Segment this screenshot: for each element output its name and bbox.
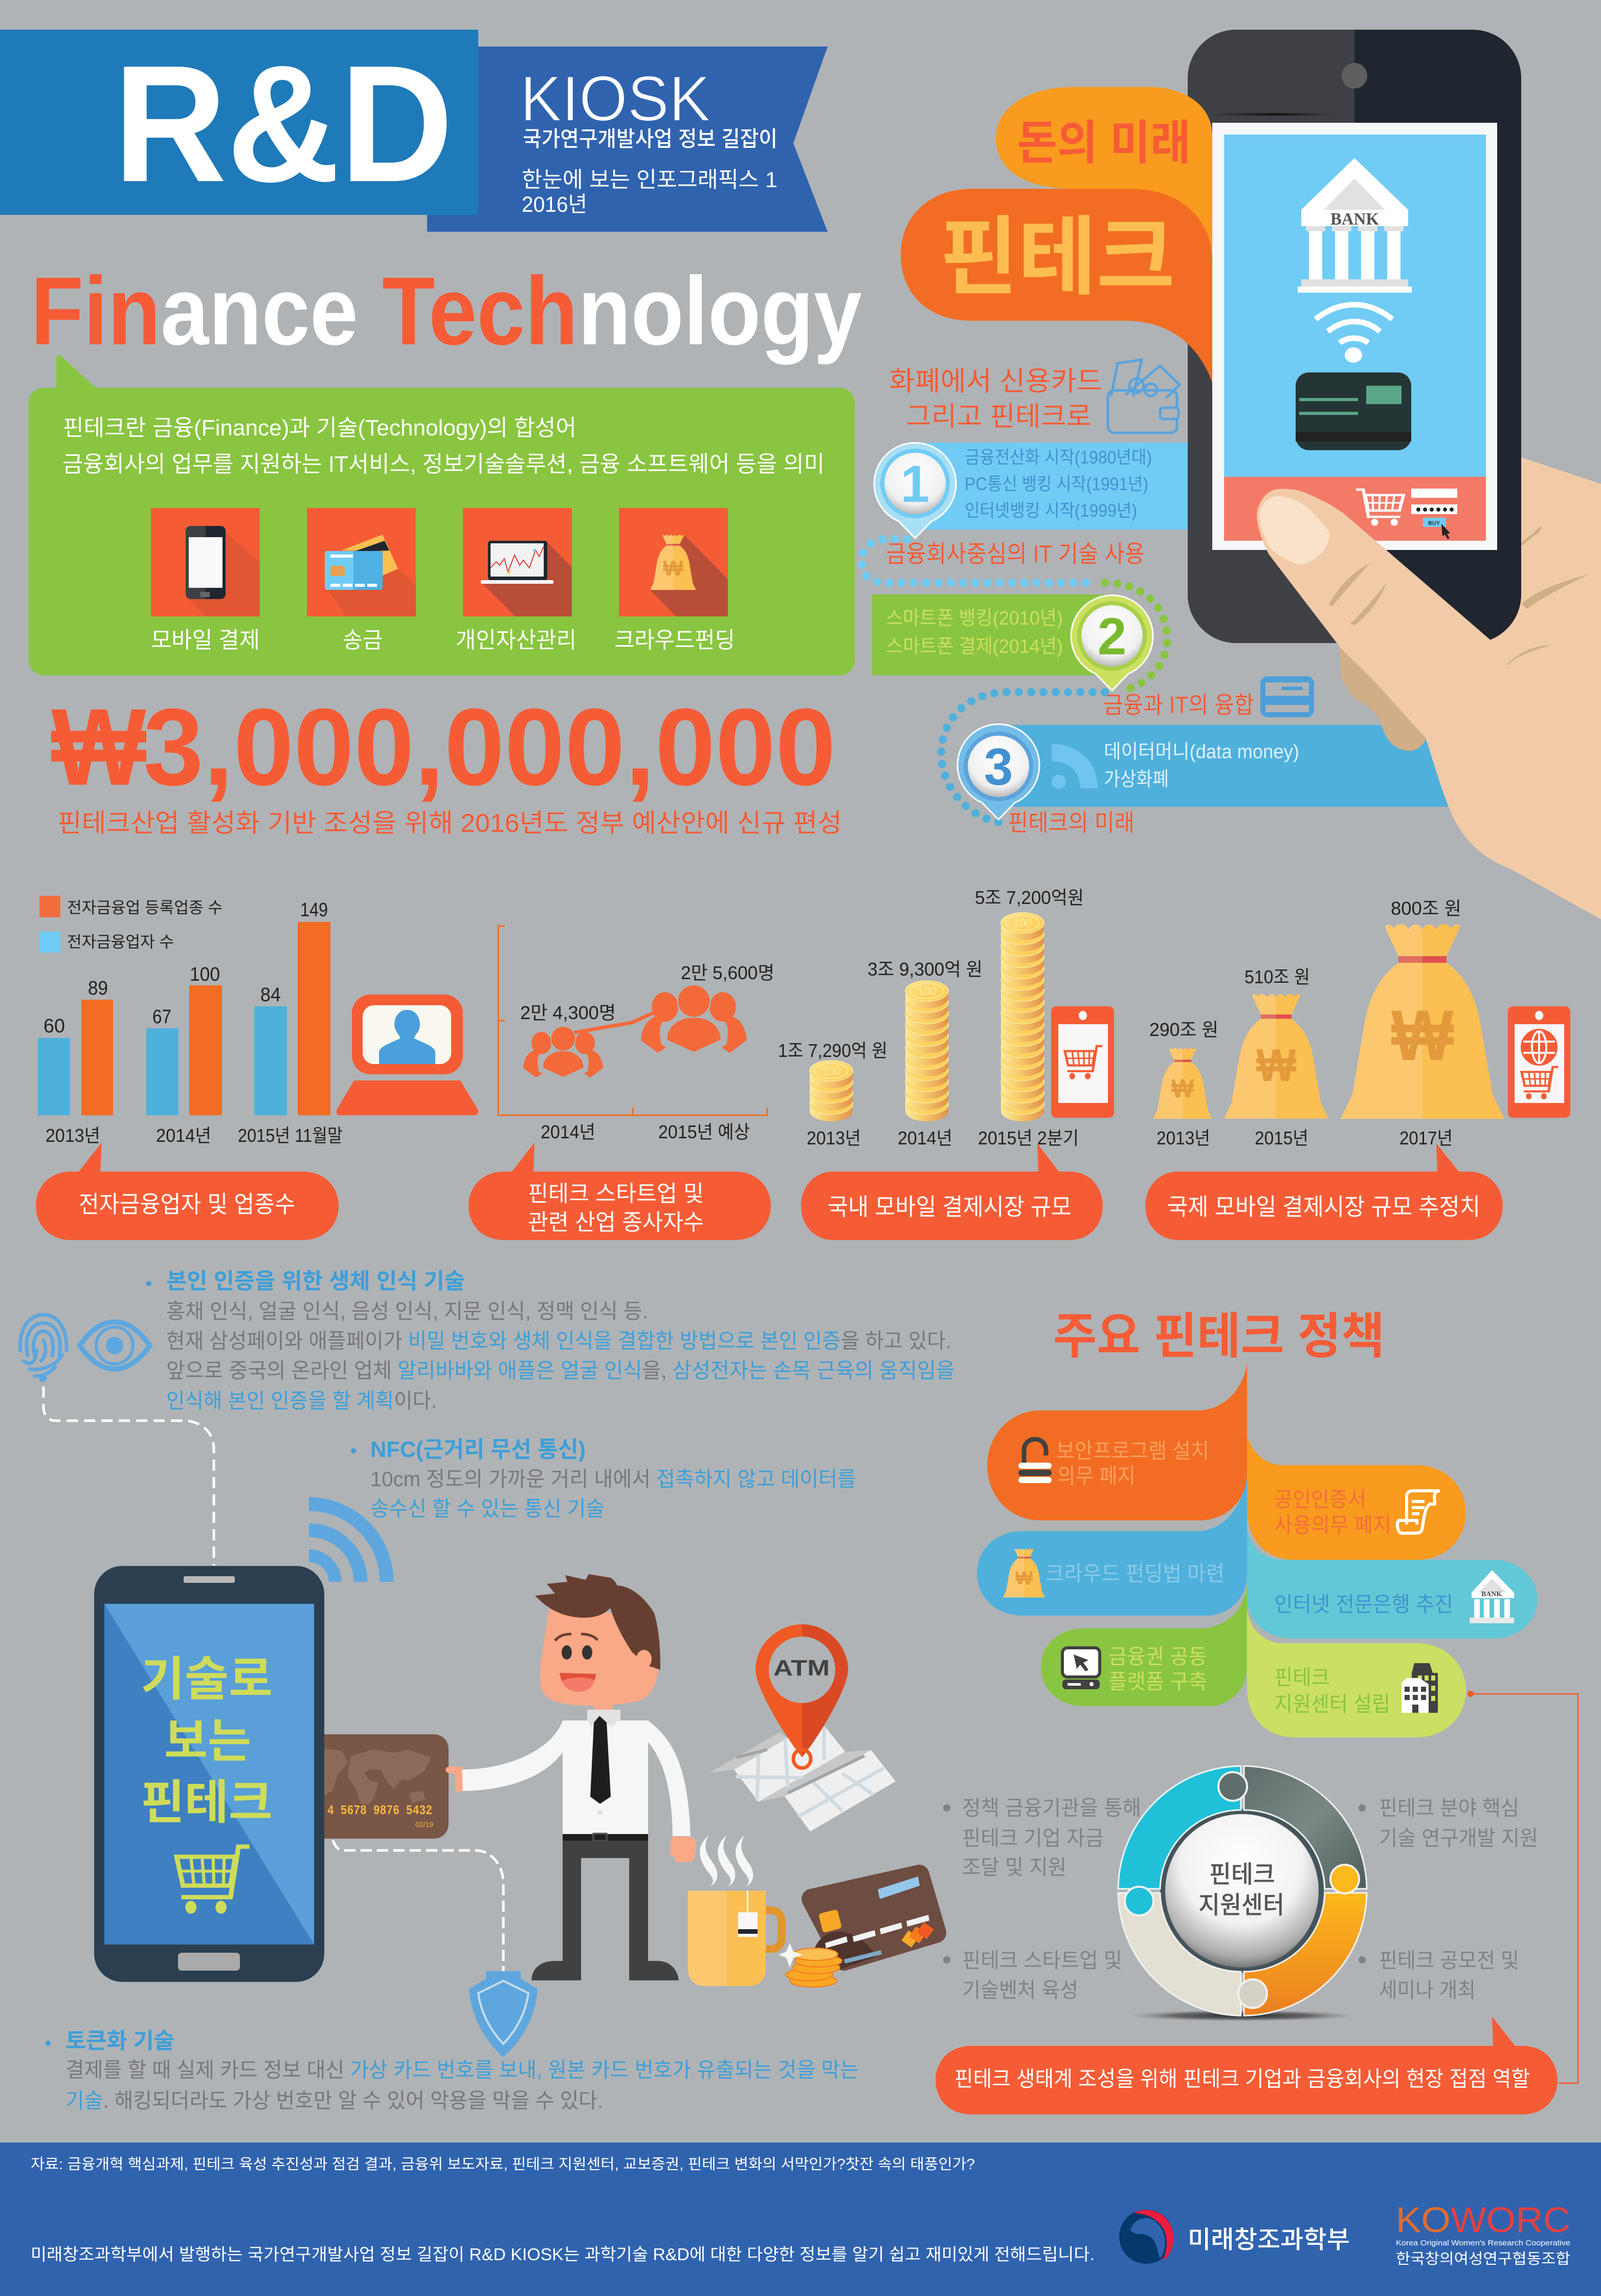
policy: fintech support center: 핀테크 [1274,1666,1330,1689]
icon: people 2014 [523,1026,603,1077]
bag 2013: ₩ [1171,1074,1194,1103]
chart: domestic mobile payment market [778,887,1114,1149]
coin stack 2013 [810,1061,853,1121]
footer [0,2143,1601,2296]
values [778,887,1084,1061]
stage 3 lines: 데이터머니(data money) [1104,741,1299,763]
icon: buildings [1402,1663,1438,1713]
quadrant: R&D [1244,1766,1367,1889]
coin stack 2015 [1001,913,1044,1121]
year labels: 2013년 [46,1125,100,1146]
icon: open lock [1018,1439,1052,1483]
icon: bank small: BANK [1481,1591,1502,1598]
bullet: startups: 기술벤처 육성 [962,1978,1078,2002]
bar values [43,899,328,1037]
icon: bank: BANK [1330,210,1380,229]
bullet: policy finance: 핀테크 기업 자금 [962,1826,1104,1850]
bullet: policy finance: 정책 금융기관을 통해 [962,1796,1141,1820]
band 3 behind hand [1003,725,1463,807]
head [535,1574,660,1712]
year labels: 2013년 [807,1128,861,1149]
quadrant: startup [1118,1893,1241,2016]
callout: fintech startups: 핀테크 스타트업 및 [528,1181,704,1206]
headline caption: 핀테크산업 활성화 기반 조성을 위해 2016년도 정부 예산안에 신규 편성 [57,809,842,837]
big phone: fintech through technology [94,1566,324,1982]
ribbon: KIOSK [427,47,828,232]
policy: security program [987,1362,1247,1520]
policy: crowdfunding platform: 금융권 공동 [1108,1645,1207,1668]
bag 2013 [1153,1048,1212,1119]
bars [38,922,330,1115]
year labels: 2013년 [1157,1128,1210,1149]
year labels [807,1128,1079,1149]
title: Finance Technology: Finance Technology [31,257,862,365]
icon: bank small [1470,1570,1514,1623]
year labels: 2015년 [1255,1128,1308,1149]
bag 2015: ₩ [1256,1040,1296,1091]
credit card being handed: 02/19 [415,1820,433,1828]
big phone text [141,1653,273,1829]
policy: accredited certificate: 사용의무 폐지 [1274,1513,1391,1537]
stage 1 lines: 금융전산화 시작(1980년대) [965,448,1152,468]
pin 3 [958,724,1039,820]
bar values: 67 [152,1006,171,1028]
policy: accredited certificate: 공인인증서 [1274,1488,1366,1511]
pin 2: 2 [1098,607,1126,666]
coin stack 2015: 100 [1013,917,1032,930]
phone screen [1212,123,1497,550]
bullet: core technology R&D [1359,1796,1538,1850]
text block: NFC [351,1437,856,1520]
pin 3: 3 [984,738,1013,796]
coin stack 2014: 100 [918,985,937,998]
values: 1조 7,290억 원 [778,1040,887,1061]
text block: biometrics: 인식해 본인 인증을 할 계획이다. [166,1389,437,1412]
text block: biometrics: 앞으로 중국의 온라인 업체 알리바바와 애플은 얼굴 인식을, 삼성전자는 손목 근육의 움직임을 [166,1359,955,1382]
icon: eye [80,1322,150,1369]
icon: ATM pin [755,1624,848,1768]
callout: support center role [936,2017,1558,2114]
label: personal finance management: 개인자산관리 [456,628,576,653]
pin 1: 1 [901,455,929,513]
icon: phone with globe and cart [1508,1006,1570,1118]
icon: wifi [1316,305,1392,363]
heading: key fintech policies: 주요 핀테크 정책 [1053,1309,1385,1364]
stage 3 lines [1104,741,1299,790]
speech bubble: fintech [901,189,1212,383]
stage 1 lines: 인터넷뱅킹 시작(1999년) [965,501,1137,521]
icon: map [709,1727,896,1831]
bullet: core technology R&D: 기술 연구개발 지원 [1379,1826,1538,1850]
text block: NFC: 10cm 정도의 가까운 거리 내에서 접촉하지 않고 데이터를 [370,1467,856,1491]
puzzle knobs [1125,1772,1359,2008]
icon: shield [469,1971,538,2057]
icon: NFC waves [309,1504,387,1582]
icon: bank [1298,158,1412,293]
diagram: fintech support center puzzle ring [1118,1766,1367,2021]
shirt [462,1710,691,1836]
icon: wallet with banknotes [1108,360,1180,433]
quadrant: funding [1118,1766,1241,1889]
policy: crowdfunding platform [1041,1586,1247,1706]
bar values: 84 [260,984,281,1006]
heading: from cash to credit cards to fintech [889,366,1102,432]
label: remittance: 송금 [343,628,383,653]
sources: 자료: 금융개혁 핵심과제, 핀테크 육성 추진성과 점검 결과, 금융위 보도자료, 핀테크 지원센터, 교보증권, 핀테크 변화의 서막인가?찻잔 속의 태풍인가? [31,2156,975,2173]
connector: support center to role callout [1467,1691,1578,2083]
text block: NFC: 송수신 할 수 있는 통신 기술 [370,1497,605,1520]
phone: bank app [1188,30,1521,643]
stage 3 caption: 핀테크의 미래 [1008,809,1135,836]
bullet: policy finance: 조달 및 지원 [962,1856,1066,1879]
text block: biometrics: 홍채 인식, 얼굴 인식, 음성 인식, 지문 인식, 정맥 인식 등. [166,1299,648,1323]
legend: 전자금융업 등록업종 수 [67,899,223,917]
policy: internet bank: 인터넷 전문은행 추진 [1274,1593,1453,1616]
label: mobile payment: 모바일 결제 [151,628,260,653]
bag 2015 [1224,994,1328,1118]
icon: terminal [1062,1648,1100,1689]
band: stage 2 [872,594,1115,675]
tie [590,1716,611,1804]
diagram: fintech support center puzzle ring: 지원센터 [1198,1892,1284,1919]
icon tile: remittance [307,508,416,616]
values: 800조 원 [1391,898,1461,919]
text block: biometrics: 본인 인증을 위한 생체 인식 기술 [166,1269,465,1294]
bar values: 60 [43,1015,65,1037]
callout: domestic market [801,1143,1103,1240]
policy: security program: 의무 폐지 [1057,1464,1136,1488]
values: 290조 원 [1149,1019,1218,1040]
bullet: contests and seminars: 세미나 개최 [1379,1978,1476,2002]
hand holding phone (back of hand) [1003,457,1601,919]
icon: people 2015 [641,985,747,1053]
headline number: 3 billion won: ₩ [51,686,146,808]
stage 1 caption: 금융회사중심의 IT 기술 사용 [886,540,1145,567]
dotted connector 2 [1105,583,1167,688]
icon: fingerprint [20,1315,66,1380]
policy: crowdfunding law [977,1473,1247,1616]
policy: crowdfunding platform: 플랫폼 구축 [1108,1670,1207,1693]
logo: KOWORC: 한국창의여성연구협동조합 [1396,2250,1570,2267]
callout: global market: 국제 모바일 결제시장 규모 추정치 [1167,1194,1480,1220]
text block: tokenization: 토큰화 기술 [65,2029,174,2054]
text block: tokenization [46,2029,859,2112]
text block: tokenization: 결제를 할 때 실제 카드 정보 대신 가상 카드 번호를 보내, 원본 카드 번호가 유출되는 것을 막는 [65,2058,859,2082]
connector: biometrics to phone [43,1386,214,1565]
legend: 전자금융업자 수 [67,933,174,951]
logo: ministry name: 미래창조과학부 [1188,2226,1350,2254]
callout: domestic market: 국내 모바일 결제시장 규모 [828,1194,1072,1220]
center label: 핀테크 [1209,1861,1275,1888]
chart: global mobile payment market [1149,898,1570,1149]
icon: scroll [1397,1491,1440,1533]
policy: security program: 보안프로그램 설치 [1056,1439,1209,1463]
band: stage 1 [917,443,1188,529]
logo: KOWORC [1396,2200,1570,2267]
legend [39,896,223,953]
year: 2016년 [522,192,587,217]
logo: ministry emblem [1119,2210,1173,2264]
bar values: 89 [88,978,108,999]
dotted connector 3 [941,692,1105,823]
bag 2017 [1341,924,1504,1119]
thumb creases [1329,525,1590,665]
dotted connector 1 [861,539,1095,583]
icon: credit card [1296,372,1411,450]
heading: from cash to credit cards to fintech: 화폐에서 신용카드 [889,366,1102,396]
bullet: contests and seminars: 핀테크 공모전 및 [1379,1949,1519,1972]
callout: global market [1145,1143,1503,1240]
icon: steaming mug [688,1835,782,1986]
icon tile: mobile payment [151,508,260,616]
bullet: startups [943,1949,1122,2002]
values [1149,898,1461,1040]
icon: ATM pin: ATM [773,1655,830,1681]
quadrant: contest [1244,1893,1367,2016]
icon: shopping cart [176,1847,250,1914]
pin 2 [1071,595,1153,691]
bar values: 149 [300,899,328,921]
value 2015: 2만 5,600명 [681,962,774,983]
axis label 2014: 2014년 [541,1121,595,1142]
value 2014: 2만 4,300명 [520,1002,616,1023]
year labels: 2015년 2분기 [978,1128,1079,1149]
year labels: 2014년 [898,1128,952,1149]
axes [498,926,767,1115]
label: crowdfunding: 크라우드펀딩 [614,628,735,653]
policy: crowdfunding law: 크라우드 펀딩법 마련 [1046,1562,1225,1585]
heading: from cash to credit cards to fintech: 그리고 핀테크로 [906,402,1092,432]
publisher note: 미래창조과학부에서 발행하는 국가연구개발사업 정보 길잡이 R&D KIOSK는 과학기술 R&D에 대한 다양한 정보를 알기 쉽고 재미있게 전해드립니다. [31,2245,1095,2264]
coin stack 2014 [905,981,948,1121]
policy: accredited certificate [1247,1434,1466,1560]
callout: e-finance firms: 전자금융업자 및 업종수 [79,1191,295,1218]
policy: crowdfunding law: ₩ [1015,1568,1033,1588]
chart: fintech startup employees [498,926,774,1142]
year labels: 2014년 [156,1125,211,1146]
KIOSK wordmark: KIOSK [520,63,710,135]
bullet: startups: 핀테크 스타트업 및 [962,1949,1122,1972]
timeline stage 3 [941,692,1299,836]
definition line 2: 금융회사의 업무를 지원하는 IT서비스, 정보기술솔루션, 금융 소프트웨어 등을 의미 [62,452,825,477]
year labels [1157,1128,1453,1149]
year labels: 2015년 11월말 [238,1125,343,1146]
credit card being handed [324,1734,449,1839]
icon: signal [1052,753,1089,789]
timeline stage 1 [861,443,1188,583]
policy: internet bank [1247,1529,1538,1639]
trousers and shoes [531,1834,679,1980]
icon: phone with cart [1051,1006,1114,1118]
stage 2 lines: 스마트폰 뱅킹(2010년) [886,608,1063,629]
subtitle: 국가연구개발사업 정보 길잡이 [523,127,777,151]
definition line 1: 핀테크란 금융(Finance)과 기술(Technology)의 합성어 [63,415,576,440]
coin pile [786,1948,842,1987]
text block: NFC: NFC(근거리 무선 통신) [370,1437,586,1462]
callout: fintech startups [469,1142,771,1240]
policy: fintech support center [1247,1610,1466,1737]
hands [446,1767,696,1862]
block: R&D: R&D [114,31,453,216]
year labels: 2017년 [1399,1128,1453,1149]
big phone text: 핀테크 [141,1777,273,1829]
text block: tokenization: 기술. 해킹되더라도 가상 번호만 알 수 있어 악용을 막을 수 있다. [65,2089,603,2112]
speech bubble: future of money [996,87,1212,256]
speech bubble: future of money: 돈의 미래 [1017,117,1191,169]
year labels [46,1125,343,1146]
thumb on phone [1257,489,1590,738]
icon: credit card with coins [779,1875,936,1987]
trend line [572,1012,654,1033]
logo: KOWORC: Korea Original Women's Research Cooperative [1396,2239,1570,2247]
headline number: 3 billion won: 3,000,000,000 [143,686,836,808]
callout: e-finance firms [36,1142,339,1240]
stage 2 caption: 금융과 IT의 융합 [1103,692,1254,718]
bar values: 100 [190,964,220,985]
text block: biometrics [146,1269,955,1412]
bullet: contests and seminars [1359,1949,1519,2002]
icon: computer user [337,995,478,1115]
bullet: policy finance [943,1796,1141,1879]
character: businessman [446,1574,696,1980]
speech bubble: fintech: 핀테크 [940,209,1175,305]
icon tile: crowdfunding: ₩ [663,556,683,580]
bag 2017: ₩ [1391,995,1454,1075]
icon tile: crowdfunding [619,508,728,616]
icon: shopping cart and buy form [1356,489,1457,539]
stage 1 lines: PC통신 뱅킹 시작(1991년) [965,474,1148,494]
stage 1 lines [965,448,1152,521]
icon: shopping cart and buy form: BUY [1428,520,1440,526]
big phone text: 보는 [164,1715,251,1768]
timeline stage 2 [872,583,1314,718]
credit card being handed: 4 5678 9876 5432 [327,1803,432,1818]
stage 3 lines: 가상화폐 [1104,769,1169,790]
logo: KOWORC: KOWORC [1396,2200,1570,2240]
big phone text: 기술로 [141,1653,273,1706]
panel: fintech definition [29,356,855,675]
stage 2 lines [886,608,1063,657]
chart: e-finance firms and business types [38,896,478,1146]
coin stack 2013: 100 [822,1065,841,1077]
text block: biometrics: 현재 삼성페이와 애플페이가 비밀 번호와 생체 인식을 결합한 방법으로 본인 인증을 하고 있다. [166,1329,951,1353]
axis label 2015: 2015년 예상 [658,1121,750,1142]
connector: card to token shield [333,1840,503,1971]
values: 510조 원 [1244,966,1310,987]
bullet: core technology R&D: 핀테크 분야 핵심 [1379,1796,1519,1820]
icon tile: personal finance management [463,508,572,616]
issue line: 한눈에 보는 인포그래픽스 1 [522,168,777,192]
callout: fintech startups: 관련 산업 종사자수 [528,1210,704,1235]
icon: card [1260,676,1314,717]
header: R&D KIOSK banner [0,30,828,232]
values: 5조 7,200억원 [975,887,1084,908]
callout: support center role: 핀테크 생태계 조성을 위해 핀테크 기업과 금융회사의 현장 접점 역할 [954,2067,1530,2091]
pin 1 [874,443,956,538]
values: 3조 9,300억 원 [868,959,983,980]
policy: fintech support center: 지원센터 설립 [1274,1692,1390,1716]
stage 2 lines: 스마트폰 결제(2014년) [886,636,1063,657]
